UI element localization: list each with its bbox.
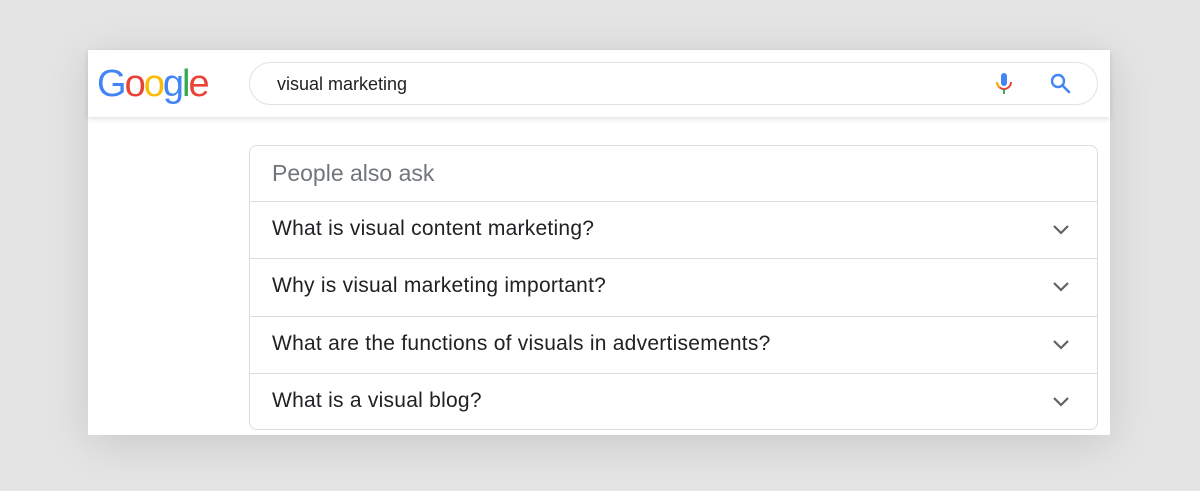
header bar — [88, 50, 1110, 117]
question 3: What are the functions of visuals in advertisements? — [272, 332, 771, 355]
question 1: What is visual content marketing? — [272, 217, 594, 240]
question 4 — [250, 373, 1097, 431]
card — [88, 50, 1110, 435]
logo: Google — [97, 63, 208, 105]
question 3 — [250, 316, 1097, 374]
question 2 — [250, 258, 1097, 316]
heading: People also ask — [272, 160, 434, 186]
icon: mic — [996, 73, 1012, 94]
panel: people also ask — [249, 145, 1098, 430]
search box: visual marketing — [277, 74, 407, 94]
icon: search — [1050, 74, 1070, 94]
question 4: What is a visual blog? — [272, 389, 482, 412]
question 2: Why is visual marketing important? — [272, 274, 606, 297]
search box — [249, 62, 1098, 105]
question 1 — [250, 201, 1097, 259]
